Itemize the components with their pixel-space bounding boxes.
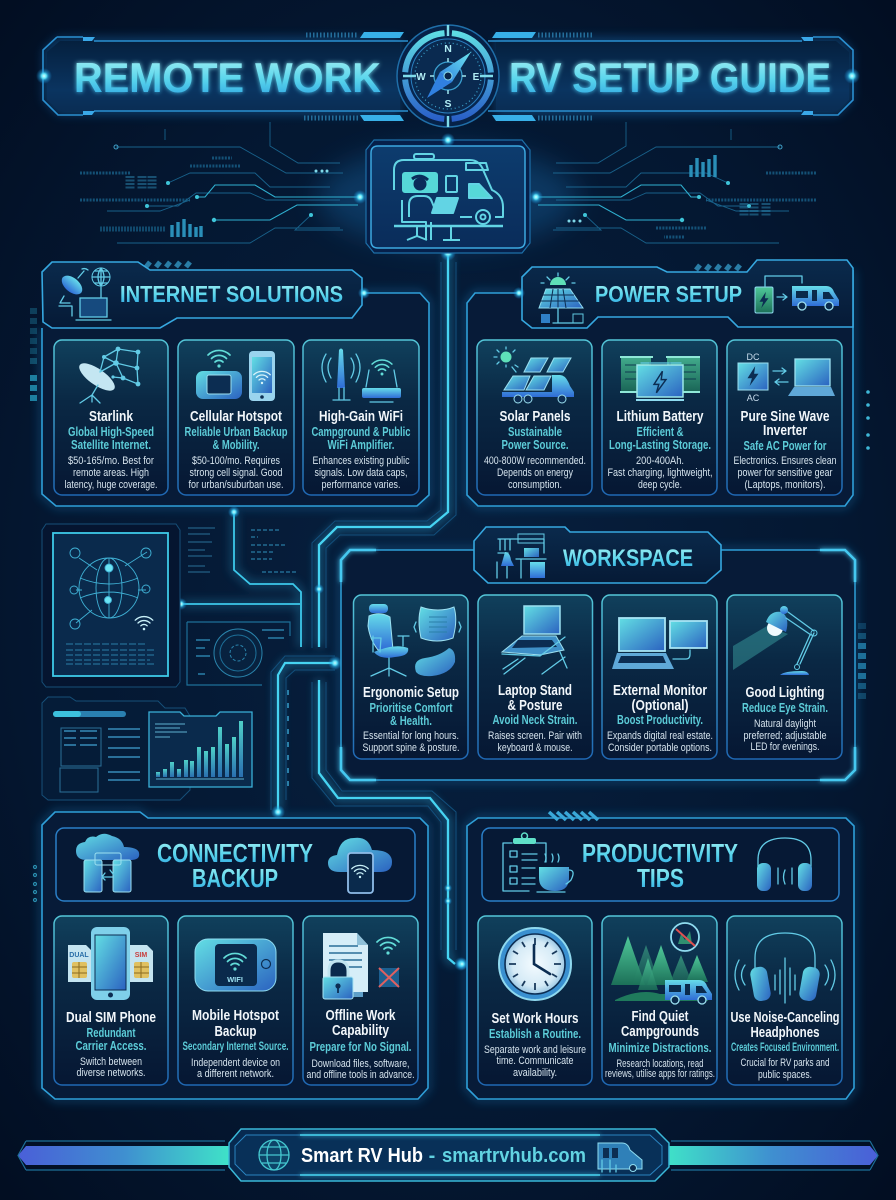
footer RV icon — [598, 1143, 642, 1172]
card: Pure Sine Wave Inverter — [727, 340, 842, 495]
card description: $50-165/mo. Best for — [68, 455, 154, 467]
decorative circuit traces left — [80, 122, 358, 243]
side meter — [858, 623, 866, 699]
card subtitle — [312, 425, 411, 452]
panel frame — [467, 818, 854, 1099]
card description: Electronics. Ensures clean — [734, 455, 836, 467]
card title: Dual SIM Phone — [66, 1010, 156, 1026]
card description: diverse networks. — [76, 1067, 146, 1079]
card description — [734, 455, 836, 491]
icon: antenna and router — [322, 348, 401, 402]
card description: remote areas. High — [73, 467, 149, 479]
card description — [312, 455, 410, 491]
card description: preferred; adjustable — [744, 730, 826, 742]
card title: Ergonomic Setup — [363, 685, 459, 701]
icon: inverter and laptop: AC — [747, 393, 760, 403]
header box — [56, 828, 415, 901]
card description: (Laptops, monitors). — [744, 479, 826, 491]
card description — [607, 730, 713, 754]
card description: Consider portable options. — [608, 742, 712, 754]
card subtitle — [502, 425, 568, 452]
card title: Campgrounds — [621, 1024, 699, 1040]
card description: Expands digital real estate. — [607, 730, 713, 742]
card description: Fast charging, lightweight, — [608, 467, 712, 479]
panel: productivity tips — [456, 812, 854, 1099]
card: Cellular Hotspot — [178, 340, 294, 495]
icon: battery bank — [620, 357, 700, 400]
card title: Capability — [332, 1023, 389, 1039]
card subtitle: Campground & Public — [312, 425, 411, 439]
card description — [740, 1057, 830, 1081]
connector: RV hub to sections — [312, 245, 468, 971]
card: Lithium Battery — [602, 340, 717, 495]
icon: compass: W — [416, 72, 426, 83]
card description: and offline tools in advance. — [306, 1069, 414, 1081]
hub halo — [318, 147, 578, 247]
card: Dual SIM Phone — [54, 916, 168, 1085]
card title: Set Work Hours — [492, 1011, 578, 1027]
card: Noise-Canceling Headphones — [727, 916, 842, 1085]
card: External Monitor: (Optional) — [632, 698, 689, 714]
card subtitle — [609, 425, 711, 452]
bar chart — [149, 712, 252, 787]
icon: laptop on stand — [502, 606, 567, 674]
card description — [608, 455, 712, 491]
card: Good Lighting — [727, 595, 842, 759]
card description: Download files, software, — [312, 1058, 410, 1070]
card description — [605, 1058, 715, 1080]
icon: documents, lock, no wifi — [323, 933, 399, 999]
card subtitle: Establish a Routine. — [489, 1027, 581, 1041]
card description: for urban/suburban use. — [188, 479, 284, 491]
footer text: - — [429, 1145, 435, 1167]
icon: battery to RV — [755, 276, 839, 313]
card subtitle — [184, 425, 288, 452]
icon: desk — [497, 534, 546, 578]
card title: Use Noise-Canceling — [730, 1010, 840, 1026]
card description: Separate work and leisure — [484, 1044, 586, 1056]
card title: Cellular Hotspot — [190, 409, 282, 425]
card description: $50-100/mo. Requires — [192, 455, 280, 467]
card title: Headphones — [750, 1025, 820, 1041]
icon: chair and cushions — [368, 604, 461, 676]
card: Solar Panels — [477, 340, 592, 495]
side dots — [34, 866, 36, 902]
heading: PRODUCTIVITY — [582, 838, 738, 868]
icon: mobile hotspot: WIFI — [227, 975, 243, 984]
panel frame — [341, 550, 855, 780]
card: Set Work Hours — [478, 916, 592, 1085]
connector: data panel to circuit — [175, 506, 301, 647]
header tab — [42, 262, 362, 328]
card description: Switch between — [80, 1056, 142, 1068]
card subtitle: Prioritise Comfort — [370, 701, 453, 715]
footer globe icon — [259, 1140, 289, 1170]
card description: Depends on energy — [497, 467, 573, 479]
card title — [192, 1008, 279, 1040]
icon: solar RV — [494, 347, 574, 403]
card title: Starlink — [89, 409, 134, 425]
title right: RV SETUP GUIDE — [509, 54, 831, 101]
card description: latency, huge coverage. — [64, 479, 158, 491]
screen — [53, 533, 168, 676]
card title — [621, 1009, 699, 1040]
card subtitle — [68, 425, 154, 452]
panel: connectivity backup — [34, 812, 428, 1099]
heading — [582, 838, 738, 893]
card description: power for sensitive gear — [738, 467, 833, 479]
heading: CONNECTIVITY — [157, 838, 313, 868]
footer banner — [18, 1129, 878, 1181]
card: Offline Work — [303, 916, 418, 1085]
icon: satellite dish — [75, 347, 140, 403]
data text rows — [66, 644, 155, 664]
panel: power setup — [467, 260, 853, 506]
card subtitle: & Health. — [390, 714, 432, 728]
panel: internet solutions — [42, 262, 429, 506]
card description — [191, 1057, 280, 1080]
card description: deep cycle. — [638, 479, 682, 491]
card description: Support spine & posture. — [362, 742, 460, 754]
card subtitle: Efficient & — [636, 425, 684, 439]
icon: forest campground — [611, 923, 712, 1004]
card: Mobile Hotspot Backup — [178, 916, 293, 1085]
card subtitle: Reliable Urban Backup — [184, 425, 288, 439]
card subtitle: Creates Focused Environment. — [731, 1042, 839, 1054]
card title: Lithium Battery — [616, 409, 704, 425]
card subtitle: Long-Lasting Storage. — [609, 438, 711, 452]
side marker dots right — [866, 390, 870, 450]
card description — [484, 455, 586, 491]
globe network — [70, 548, 151, 629]
card: Ergonomic Setup — [354, 595, 468, 759]
icon: compass: E — [473, 72, 480, 83]
panel: network map display — [42, 524, 180, 687]
decorative circuit traces right — [538, 122, 816, 243]
card: Pure Sine Wave Inverter: Inverter — [763, 423, 807, 439]
card description — [188, 455, 284, 491]
card description — [362, 730, 460, 754]
heading: WORKSPACE — [563, 545, 693, 572]
card description: a different network. — [197, 1068, 274, 1080]
card description: strong cell signal. Good — [190, 467, 282, 479]
card subtitle: Carrier Access. — [76, 1039, 146, 1053]
footer text — [301, 1145, 586, 1167]
card title: Solar Panels — [500, 409, 570, 425]
footer right bar — [667, 1141, 878, 1170]
card title: High-Gain WiFi — [319, 409, 403, 425]
wifi mark — [135, 617, 153, 630]
icon: clock — [499, 928, 571, 1000]
card: High-Gain WiFi — [303, 340, 419, 495]
banner frame — [36, 32, 860, 121]
icon: clipboard and coffee — [503, 833, 573, 892]
header box — [482, 828, 839, 901]
card subtitle — [370, 701, 453, 728]
card description: Raises screen. Pair with — [488, 730, 582, 742]
card subtitle: Power Source. — [502, 438, 568, 452]
icon: satellite and laptop — [58, 268, 111, 320]
icon: mobile hotspot — [195, 939, 276, 991]
card subtitle: Satellite Internet. — [71, 438, 151, 452]
header tab — [522, 260, 853, 328]
card description: time. Communicate — [496, 1055, 574, 1067]
card subtitle: Reduce Eye Strain. — [742, 701, 828, 715]
card description — [306, 1058, 414, 1081]
card: Laptop Stand: & Posture — [508, 698, 562, 714]
card description: Natural daylight — [754, 718, 816, 730]
connector: workspace to left — [271, 656, 342, 819]
card description — [488, 730, 582, 754]
card subtitle: Avoid Neck Strain. — [492, 713, 578, 727]
card description: Research locations, read — [616, 1058, 704, 1070]
panel: analytics dashboard — [42, 697, 252, 800]
icon: phone and SIM cards: DUAL — [69, 952, 89, 959]
card subtitle: Secondary Internet Source. — [182, 1041, 288, 1053]
card description: Essential for long hours. — [363, 730, 459, 742]
card description: Independent device on — [191, 1057, 280, 1069]
central RV hub — [353, 133, 543, 253]
hub frame — [353, 133, 543, 253]
icon: RV with remote worker — [394, 154, 503, 240]
card title: Offline Work — [326, 1008, 396, 1024]
card description: keyboard & mouse. — [498, 742, 572, 754]
card subtitle: WiFi Amplifier. — [328, 438, 394, 452]
card: External Monitor — [602, 595, 717, 759]
card subtitle: Global High-Speed — [68, 425, 154, 439]
footer left bar — [18, 1141, 229, 1170]
card subtitle: Sustainable — [508, 425, 562, 439]
connector node — [513, 287, 525, 299]
card description: public spaces. — [758, 1069, 812, 1081]
footer text: smartrvhub.com — [442, 1145, 586, 1167]
card subtitle: Minimize Distractions. — [608, 1041, 712, 1055]
header stripes — [696, 265, 740, 270]
panel: radar display — [187, 622, 290, 685]
footer plaque — [229, 1129, 669, 1181]
card description: 200-400Ah. — [636, 455, 684, 467]
icon: solar array — [539, 273, 583, 323]
panel frame — [42, 293, 429, 506]
card subtitle: Boost Productivity. — [617, 713, 703, 727]
card title — [730, 1010, 840, 1041]
icon: compass — [397, 25, 499, 127]
card subtitle: & Mobility. — [212, 438, 260, 452]
panel frame — [42, 812, 428, 1099]
card description — [744, 718, 826, 753]
icon: inverter and laptop — [738, 352, 835, 403]
card: Laptop Stand — [478, 595, 592, 759]
connector node — [456, 958, 468, 970]
card description: 400-800W recommended. — [484, 455, 586, 467]
card title: Backup — [214, 1024, 257, 1040]
icon: cloud phones — [76, 834, 139, 892]
icon: phone and SIM cards: SIM — [135, 952, 147, 959]
card title: Pure Sine Wave — [740, 409, 830, 425]
icon: desk lamp — [733, 606, 817, 675]
header stripes — [549, 812, 598, 820]
card: Starlink — [54, 340, 168, 495]
title left: REMOTE WORK — [74, 54, 381, 101]
card subtitle: Safe AC Power for — [744, 439, 827, 453]
heading: TIPS — [637, 863, 684, 893]
card description — [64, 455, 158, 491]
heading: POWER SETUP — [595, 281, 742, 307]
header stripes — [146, 262, 190, 267]
card description — [76, 1056, 146, 1079]
icon: cloud phone wifi — [328, 838, 392, 893]
card subtitle: Redundant — [86, 1026, 136, 1040]
connector node — [358, 287, 370, 299]
panel frame — [467, 270, 853, 506]
card subtitle: Prepare for No Signal. — [310, 1040, 412, 1054]
card: Find Quiet Campgrounds — [602, 916, 717, 1085]
card description: signals. Low data caps, — [314, 467, 408, 479]
icon: hotspot and phone — [196, 350, 275, 401]
card description: availability. — [513, 1067, 557, 1079]
card title: Find Quiet — [632, 1009, 689, 1025]
card title: External Monitor — [613, 683, 707, 699]
panel: workspace — [341, 527, 866, 780]
card title: Laptop Stand — [498, 683, 572, 699]
card description: reviews, utilise apps for ratings. — [605, 1068, 715, 1080]
card title: Good Lighting — [746, 685, 824, 701]
card description: Enhances existing public — [312, 455, 410, 467]
card description: Crucial for RV parks and — [740, 1057, 830, 1069]
footer text: Smart RV Hub — [301, 1145, 423, 1167]
icon: noise-canceling headphones — [735, 933, 835, 1003]
header tab — [474, 527, 721, 583]
heading: INTERNET SOLUTIONS — [120, 281, 343, 307]
card subtitle — [76, 1026, 146, 1053]
icon: inverter and laptop: DC — [746, 352, 760, 362]
icon: compass: S — [444, 98, 452, 110]
device frame — [42, 524, 180, 687]
card description: LED for evenings. — [750, 741, 820, 753]
side marker strip left — [30, 308, 37, 401]
title banner — [36, 25, 860, 127]
card description — [484, 1044, 586, 1079]
heading: BACKUP — [192, 863, 278, 893]
icon: laptop and monitor — [612, 618, 707, 669]
icon: phone and SIM cards — [68, 927, 153, 1000]
card description: performance varies. — [322, 479, 400, 491]
heading — [157, 838, 313, 893]
card description: consumption. — [508, 479, 562, 491]
card title: Mobile Hotspot — [192, 1008, 279, 1024]
icon: headphones — [757, 838, 812, 891]
card title — [326, 1008, 396, 1039]
icon: compass: N — [444, 43, 452, 55]
